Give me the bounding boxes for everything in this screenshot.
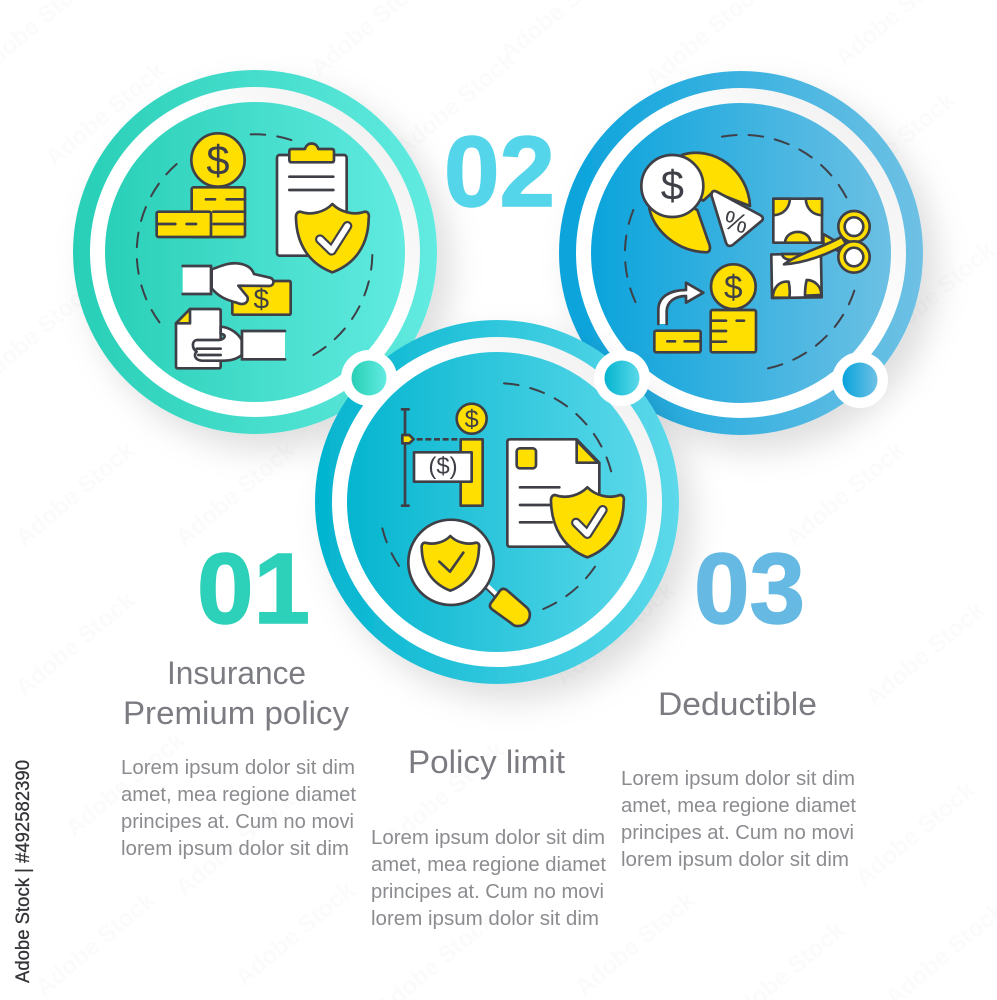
text block: column 3: lorem ipsum dolor sit dim <box>621 849 849 871</box>
background watermark: Adobe Stock <box>860 596 991 712</box>
icon: insurance premium group: $ <box>254 283 270 314</box>
background watermark: Adobe Stock <box>870 236 997 352</box>
text block: column 3 <box>621 768 856 871</box>
stock credit: Adobe Stock | #492582390 <box>13 760 34 983</box>
heading: insurance premium policy <box>123 655 349 731</box>
icon: policy limit group: $ <box>465 405 479 433</box>
background watermark: Adobe Stock <box>550 576 681 692</box>
background watermark: Adobe Stock <box>40 56 171 172</box>
text block: column 1: principes at. Cum no movi <box>121 811 354 833</box>
connector dot 2 <box>832 352 888 408</box>
text block: column 1: lorem ipsum dolor sit dim <box>121 838 349 860</box>
icon: deductible group: $ <box>661 162 684 209</box>
text block: column 2: principes at. Cum no movi <box>371 881 604 903</box>
text block: column 2: Lorem ipsum dolor sit dim <box>371 827 605 849</box>
text block: column 2: amet, mea regione diamet <box>371 854 606 876</box>
background watermark: Adobe Stock <box>10 586 141 702</box>
heading: deductible: Deductible <box>658 686 817 722</box>
background watermark: Adobe Stock <box>850 776 981 892</box>
text block: column 2 <box>371 827 606 930</box>
text block: column 2: lorem ipsum dolor sit dim <box>371 908 599 930</box>
background watermark: Adobe Stock <box>170 436 301 552</box>
background watermark: Adobe Stock <box>570 886 701 1000</box>
background watermark: Adobe Stock <box>10 436 141 552</box>
icon: deductible group: $ <box>724 269 743 306</box>
icon: insurance premium group <box>137 133 372 368</box>
text block: column 3: principes at. Cum no movi <box>621 822 854 844</box>
text block: column 1 <box>121 757 356 860</box>
icon: deductible group: % <box>721 204 751 240</box>
background watermark: Adobe Stock <box>230 876 361 992</box>
panel: circle 2 deductible <box>559 71 923 435</box>
icon: deductible group <box>625 135 870 369</box>
background watermark: Adobe Stock <box>780 436 911 552</box>
text block: column 3: amet, mea regione diamet <box>621 795 856 817</box>
number 03: 03 <box>694 533 805 645</box>
icon: policy limit group <box>382 383 624 626</box>
heading: insurance premium policy: Premium policy <box>123 695 349 731</box>
panel: circle 3 policy limit <box>315 320 679 684</box>
icon: insurance premium group: $ <box>206 136 230 183</box>
number 02: 02 <box>444 116 555 228</box>
heading: policy limit: Policy limit <box>408 744 565 780</box>
panel: circle 1 insurance premium <box>73 70 437 434</box>
background watermark: Adobe Stock <box>30 886 161 1000</box>
text block: column 3: Lorem ipsum dolor sit dim <box>621 768 855 790</box>
background watermark: Adobe Stock <box>390 46 521 162</box>
text block: column 1: amet, mea regione diamet <box>121 784 356 806</box>
background watermark: Adobe Stock <box>170 786 301 902</box>
icon: policy limit group: ($) <box>428 453 458 480</box>
heading: insurance premium policy: Insurance <box>167 655 306 691</box>
background watermark: Adobe Stock <box>60 726 191 842</box>
connector dot 3 <box>594 350 650 406</box>
text block: column 1: Lorem ipsum dolor sit dim <box>121 757 355 779</box>
number 01: 01 <box>197 533 310 645</box>
background watermark: Adobe Stock <box>830 86 961 202</box>
connector dot 1 <box>341 350 397 406</box>
background watermark: Adobe Stock <box>380 736 511 852</box>
